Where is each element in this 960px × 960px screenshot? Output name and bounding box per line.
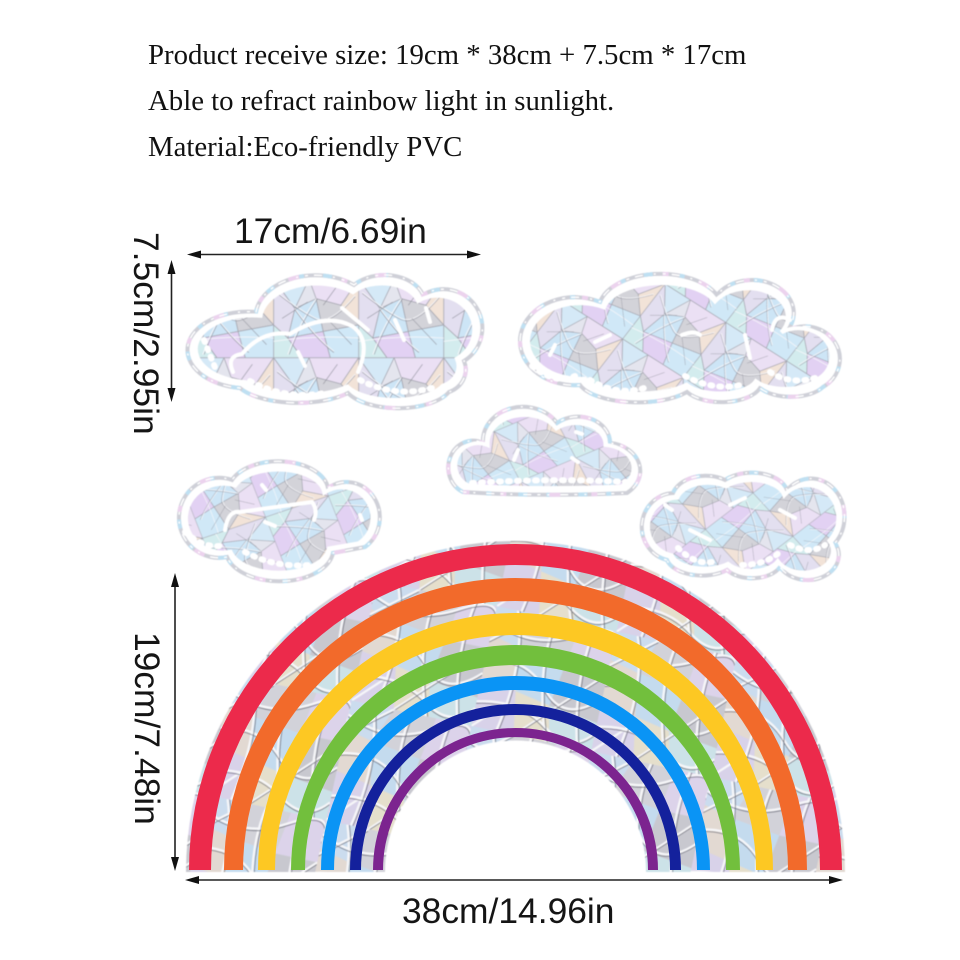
- dimension label: cloud width: 17cm/6.69in: [234, 211, 427, 251]
- band: red: [189, 544, 842, 870]
- arrow: rainbow width: [185, 876, 843, 884]
- cloud sticker: lower left: [179, 461, 380, 581]
- cloud sticker: middle small: [448, 407, 640, 495]
- arrow: cloud height: [168, 260, 176, 402]
- dimension label: rainbow height: 19cm/7.48in: [127, 632, 167, 825]
- band: blue: [321, 676, 710, 870]
- cloud sticker: lower right: [642, 473, 845, 580]
- arrow: rainbow height: [171, 573, 179, 871]
- product description text: Material:Eco-friendly PVC: [148, 131, 462, 163]
- band: purple: [373, 728, 658, 870]
- band: orange: [224, 578, 807, 870]
- band: navy: [350, 704, 681, 870]
- product description text: Able to refract rainbow light in sunlight.: [148, 85, 614, 117]
- rainbow sticker: [186, 541, 845, 872]
- dimension label: rainbow width: 38cm/14.96in: [402, 891, 614, 931]
- cloud sticker: top left: [187, 275, 482, 408]
- product description text: Product receive size: 19cm * 38cm + 7.5cm * 17cm: [148, 39, 746, 71]
- cloud sticker: top right: [520, 274, 840, 402]
- holographic backing: [186, 541, 845, 872]
- dimension label: cloud height: 7.5cm/2.95in: [126, 232, 166, 435]
- band: green: [291, 645, 740, 870]
- band: yellow: [258, 613, 773, 870]
- product description text: [148, 39, 746, 163]
- arrow: cloud width: [187, 250, 481, 258]
